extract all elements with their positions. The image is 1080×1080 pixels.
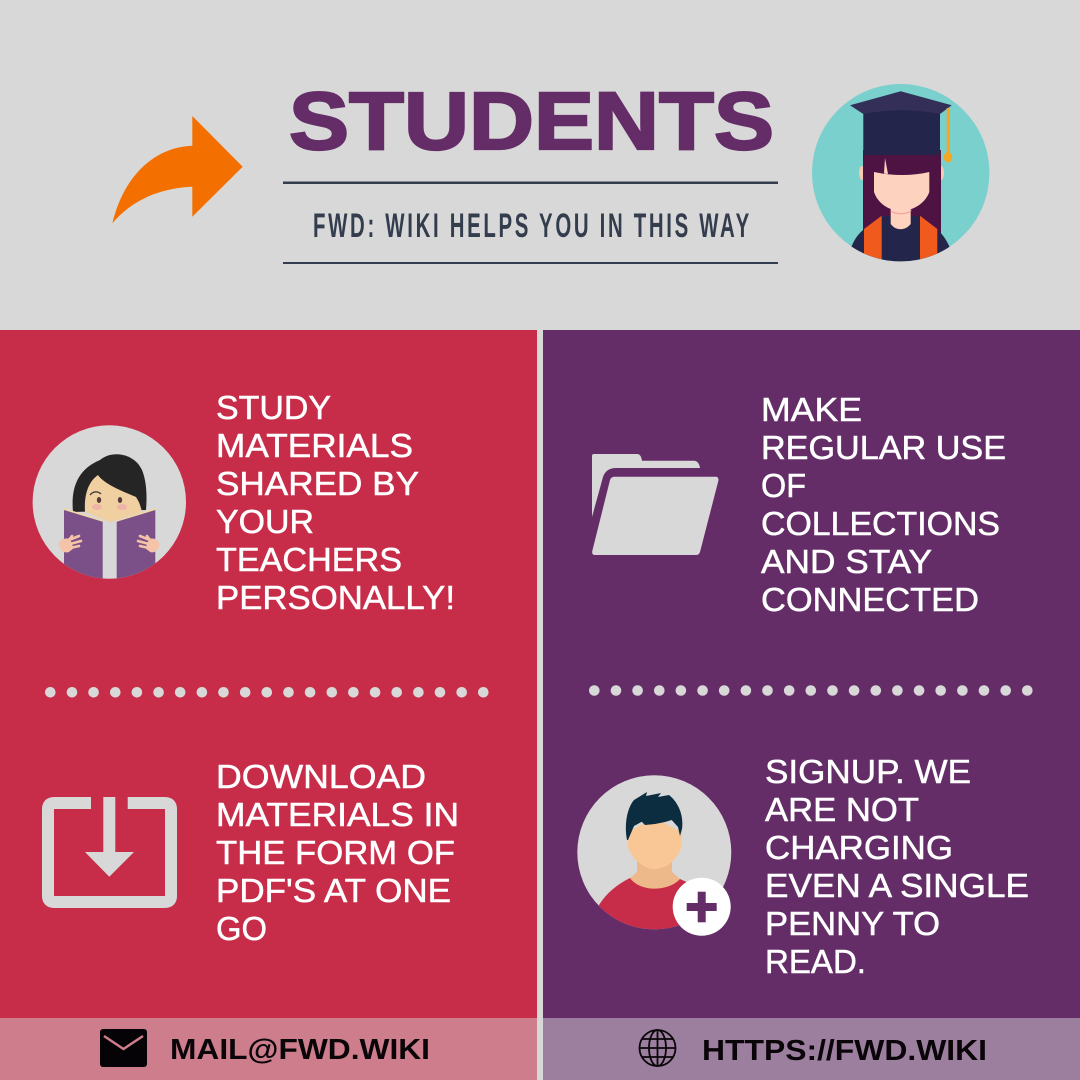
text: collections: AND STAY — [761, 543, 932, 580]
icon: globe — [640, 1030, 676, 1066]
text: study materials: MATERIALS — [216, 427, 413, 464]
text: signup: SIGNUP. WE — [765, 753, 971, 790]
text: download materials: THE FORM OF — [216, 834, 455, 871]
text: download materials: MATERIALS IN — [216, 796, 459, 833]
text: study materials — [216, 389, 455, 616]
icon: folder — [592, 454, 718, 555]
text: collections: MAKE — [761, 391, 862, 428]
text: study materials: SHARED BY — [216, 465, 419, 502]
text: signup: READ. — [765, 943, 866, 980]
icon: graduate avatar — [812, 84, 989, 265]
text: signup: ARE NOT — [765, 791, 919, 828]
icon: orange forward arrow — [112, 116, 243, 223]
dotted divider: left — [45, 687, 489, 698]
text: collections: REGULAR USE — [761, 429, 1006, 466]
footer: email — [0, 1018, 537, 1080]
text: study materials: PERSONALLY! — [216, 579, 455, 616]
icon: user with plus badge — [577, 775, 731, 936]
text: signup: EVEN A SINGLE — [765, 867, 1029, 904]
text: download materials: PDF'S AT ONE — [216, 872, 451, 909]
text: collections: CONNECTED — [761, 581, 979, 618]
text: collections: COLLECTIONS — [761, 505, 1000, 542]
text: signup: PENNY TO — [765, 905, 940, 942]
text: study materials: YOUR — [216, 503, 314, 540]
icon: download — [48, 797, 171, 902]
email address: MAIL@FWD.WIKI — [170, 1034, 430, 1066]
dotted divider: right — [589, 685, 1033, 696]
title: STUDENTS — [289, 76, 774, 167]
text: download materials: GO — [216, 910, 267, 947]
website address: HTTPS://FWD.WIKI — [702, 1035, 987, 1067]
panel: study materials (red) — [0, 330, 537, 1018]
icon: envelope — [100, 1029, 147, 1067]
text: download materials — [216, 758, 459, 947]
text: collections: OF — [761, 467, 806, 504]
subtitle with rules: FWD: WIKI HELPS YOU IN THIS WAY — [313, 207, 749, 244]
text: study materials: STUDY — [216, 389, 331, 426]
panel: collections (purple) — [543, 330, 1080, 1018]
footer: website — [543, 1018, 1080, 1080]
text: signup: CHARGING — [765, 829, 953, 866]
icon: girl reading book — [33, 425, 186, 582]
text: collections — [761, 391, 1006, 618]
text: study materials: TEACHERS — [216, 541, 402, 578]
text: download materials: DOWNLOAD — [216, 758, 426, 795]
header section — [112, 76, 989, 265]
text: signup — [765, 753, 1029, 980]
